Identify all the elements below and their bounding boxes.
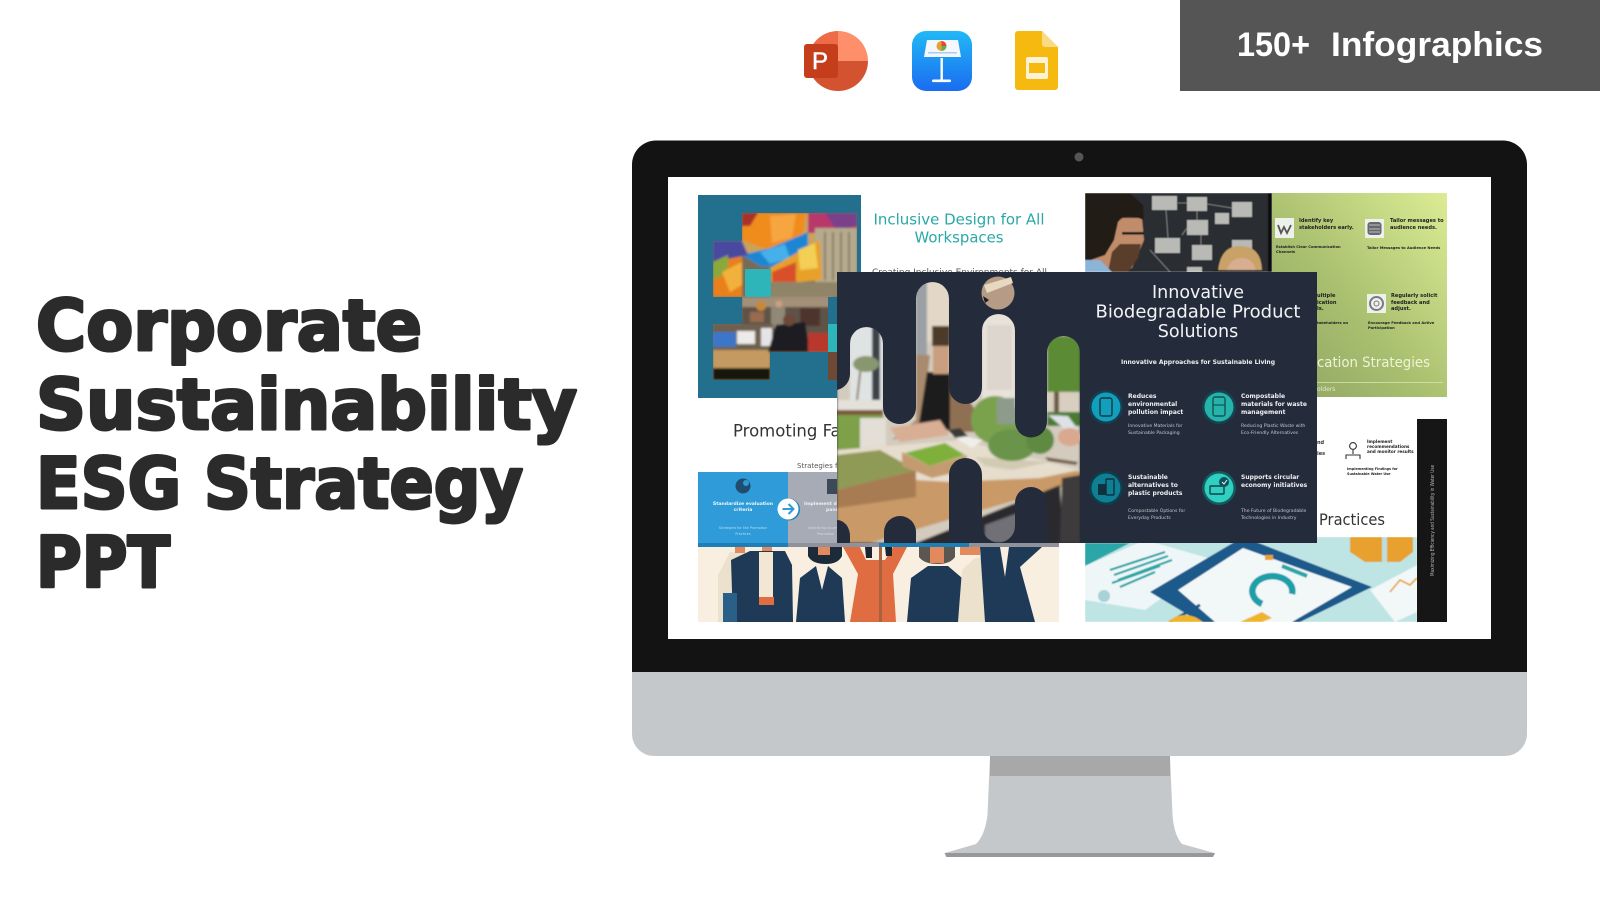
slide caption: olders <box>1317 386 1335 393</box>
photo collage <box>837 272 1082 543</box>
slide: inclusive design <box>698 195 1047 398</box>
green panel <box>1272 193 1447 397</box>
benefit: reduces pollution: Reduces <box>1128 393 1157 400</box>
title: ESG Strategy <box>36 443 523 525</box>
benefit: reduces pollution: environmental <box>1128 401 1177 408</box>
column: standardize: Strategies for Fair Promotion <box>719 526 767 530</box>
office photo mosaic <box>713 213 857 380</box>
slide heading <box>874 210 1044 246</box>
benefit: circular economy: The Future of Biodegradable <box>1240 508 1307 514</box>
recommendation text <box>1367 439 1414 454</box>
monitor chin <box>632 672 1527 756</box>
benefit: reduces pollution: pollution impact <box>1128 409 1183 416</box>
benefit: compostable materials: Compostable <box>1241 393 1285 400</box>
slide heading: Practices <box>1319 510 1385 529</box>
item 2: audience needs. <box>1390 225 1437 231</box>
slide: innovative biodegradable product solutions <box>837 272 1317 543</box>
benefit: circular economy: economy initiatives <box>1241 482 1308 489</box>
recommendation text: Implement <box>1367 439 1392 444</box>
benefit: reduces pollution: Sustainable Packaging <box>1128 430 1180 436</box>
banner: 150+ Infographics <box>1180 0 1600 91</box>
icon: brain gear <box>736 478 750 494</box>
slide heading: Innovative <box>1152 283 1244 303</box>
recommendation text: and monitor results <box>1367 449 1414 454</box>
icon: Google Slides <box>1015 31 1058 90</box>
illustration: business people <box>698 547 1059 622</box>
table <box>837 470 1080 543</box>
benefit: compostable materials: materials for waste <box>1241 401 1307 408</box>
title: PPT <box>36 522 170 604</box>
column: implement: Implement diversity <box>804 501 856 507</box>
item 4 <box>1367 293 1438 330</box>
item 3 <box>1317 293 1348 325</box>
arrow button <box>778 498 800 520</box>
slide text fragment: ies <box>1317 451 1325 457</box>
benefit: compostable materials <box>1202 390 1307 436</box>
benefit: sustainable alternatives: Everyday Products <box>1128 515 1171 521</box>
recommendation text: recommendations <box>1367 444 1410 449</box>
panel <box>837 272 1317 543</box>
item 1: Establish Clear Communication <box>1276 245 1341 249</box>
recommendation caption <box>1347 467 1398 476</box>
item 3: ication <box>1317 300 1337 306</box>
benefit: circular economy: Supports circular <box>1241 474 1299 481</box>
title: Corporate <box>36 285 422 367</box>
slide heading: Biodegradable Product <box>1096 302 1301 322</box>
column: implement: Identifying issues <box>808 526 838 530</box>
column: implement: panels <box>826 507 843 513</box>
slide subheading: Creating Inclusive Environments for All <box>872 268 1047 278</box>
item 3: ultiple <box>1317 293 1336 299</box>
camera <box>1074 152 1084 162</box>
accent bars <box>698 543 1059 547</box>
item 1: stakeholders early. <box>1299 225 1354 231</box>
recommendation caption: Implementing Findings for <box>1347 467 1398 471</box>
slide heading: Solutions <box>1158 322 1238 342</box>
banner: 150+ Infographics: Infographics <box>1331 26 1543 64</box>
slide heading: Inclusive Design for All <box>874 210 1044 228</box>
benefit: reduces pollution: Innovative Materials for <box>1128 423 1183 429</box>
side bar: Maximizing Efficiency and Sustainability in Water Use <box>1430 465 1436 576</box>
benefit: reduces pollution <box>1089 390 1183 436</box>
slide subheading: Strategies for Fair Promotion <box>797 462 897 470</box>
plants <box>971 396 1019 444</box>
item 4: Regularly solicit <box>1391 293 1438 299</box>
benefit: sustainable alternatives: alternatives to <box>1128 482 1178 489</box>
item 1: Identify key <box>1299 218 1334 224</box>
recommendation caption: Sustainable Water Use <box>1347 472 1391 476</box>
icon: PowerPoint: P <box>812 48 828 75</box>
title: Sustainability <box>36 364 577 446</box>
item 1: Channels <box>1276 250 1296 254</box>
monitor <box>632 140 1527 857</box>
item 1 <box>1275 218 1354 254</box>
icon: process person <box>1346 443 1360 459</box>
slide heading <box>1096 283 1301 342</box>
man <box>892 355 930 440</box>
teal block <box>745 269 771 297</box>
boardroom photo <box>1085 193 1272 272</box>
benefit: compostable materials: Reducing Plastic Waste with <box>1241 423 1305 429</box>
slide heading: Promoting Fair Practices <box>733 422 932 440</box>
column: implement: Promotion <box>817 532 834 536</box>
item 4: feedback and <box>1391 300 1430 306</box>
item 2: Tailor Messages to Audience Needs <box>1367 246 1441 250</box>
arched mask top <box>837 272 1080 438</box>
monitor bezel <box>632 140 1527 672</box>
slide: promoting fair practices <box>698 422 1059 622</box>
item 4: Participation <box>1368 326 1395 330</box>
circle photo window <box>982 276 1014 310</box>
benefit: circular economy: Technologies in Industry <box>1240 515 1297 521</box>
slide heading: Workspaces <box>914 228 1004 246</box>
title <box>36 285 577 604</box>
slide subheading: Innovative Approaches for Sustainable Living <box>1121 358 1275 366</box>
side bar <box>1417 419 1447 622</box>
slide: water use practices <box>1085 419 1447 622</box>
benefit: sustainable alternatives: Sustainable <box>1128 474 1168 481</box>
illustration: data dashboard <box>1085 537 1417 622</box>
benefit: compostable materials: management <box>1241 409 1286 416</box>
item 4: adjust. <box>1391 306 1411 312</box>
item 3: ls. <box>1317 306 1324 312</box>
benefit: sustainable alternatives: Compostable Options for <box>1128 508 1185 514</box>
slide text fragment: nd <box>1317 440 1325 446</box>
slide: communication strategies <box>1085 193 1447 397</box>
banner: 150+ Infographics: 150+ <box>1237 26 1310 64</box>
monitor screen <box>668 177 1491 639</box>
column: implement <box>788 472 878 543</box>
item 4: Encourage Feedback and Active <box>1368 321 1435 325</box>
slide text fragment <box>1317 440 1325 457</box>
benefit: sustainable alternatives <box>1089 471 1185 521</box>
slide heading: cation Strategies <box>1317 355 1430 371</box>
column: standardize: Standardize evaluation <box>713 501 773 507</box>
benefit: circular economy <box>1202 471 1308 521</box>
benefit: sustainable alternatives: plastic products <box>1128 490 1183 497</box>
column: standardize <box>698 472 788 543</box>
arched mask bottom <box>949 458 1047 543</box>
column: standardize: criteria <box>734 507 752 513</box>
monitor stand <box>944 756 1215 857</box>
icon: Keynote <box>912 31 972 91</box>
icon: PowerPoint <box>804 31 868 91</box>
item 2 <box>1365 218 1444 250</box>
item 2: Tailor messages to <box>1390 218 1444 224</box>
item 3: takeholders on <box>1317 321 1348 325</box>
benefit: compostable materials: Eco-Friendly Alternatives <box>1241 430 1299 436</box>
column: standardize: Practices <box>735 532 751 536</box>
